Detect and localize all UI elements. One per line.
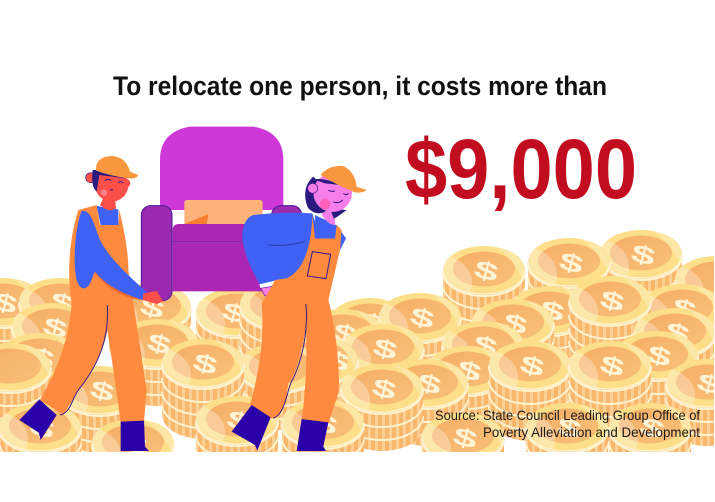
pile of gold coins: $ (27, 412, 58, 445)
pile of gold coins: $ (120, 428, 151, 461)
pile of gold coins: $ (40, 312, 71, 345)
mover: right worker (232, 166, 367, 451)
pile of gold coins: $ (224, 405, 255, 438)
pile of gold coins: $ (662, 317, 693, 350)
pile of gold coins: $ (500, 308, 531, 341)
pile of gold coins: $ (310, 408, 341, 441)
pile of gold coins: $ (414, 368, 445, 401)
infographic canvas (0, 76, 714, 452)
pile of gold coins: $ (357, 307, 388, 340)
pile of gold coins: $ (597, 350, 628, 383)
pile of gold coins: $ (370, 333, 401, 366)
pile of gold coins: $ (537, 295, 568, 328)
pile of gold coins: $ (628, 239, 659, 272)
pile of gold coins: $ (322, 345, 353, 378)
pile of gold coins: $ (450, 422, 481, 455)
pile of gold coins: $ (190, 348, 221, 381)
pile of gold coins: $ (517, 350, 548, 383)
pile of gold coins: $ (597, 285, 628, 318)
pile of gold coins (0, 230, 715, 502)
pile of gold coins: $ (644, 340, 675, 373)
illustration: movers and armchair (19, 127, 367, 451)
pile of gold coins: $ (407, 302, 438, 335)
armchair (141, 127, 302, 301)
big number: cost: $9,000 (405, 122, 637, 216)
pile of gold coins: $ (669, 293, 700, 326)
mover: left worker (19, 156, 163, 451)
pile of gold coins: $ (556, 247, 587, 280)
pile of gold coins: $ (87, 375, 118, 408)
pile of gold coins: $ (454, 355, 485, 388)
pile of gold coins: $ (471, 255, 502, 288)
pile of gold coins: $ (144, 328, 175, 361)
pile of gold coins: $ (219, 297, 250, 330)
pile of gold coins: $ (27, 342, 58, 375)
title: To relocate one person, it costs more than (113, 71, 607, 101)
pile of gold coins: $ (137, 292, 168, 325)
source note: Poverty Alleviation and Development (483, 424, 700, 440)
source note: Source: State Council Leading Group Office of (435, 407, 700, 423)
pile of gold coins: $ (47, 287, 78, 320)
source note (435, 407, 700, 440)
pile of gold coins: $ (637, 412, 668, 445)
pile of gold coins: $ (369, 373, 400, 406)
pile of gold coins: $ (554, 412, 585, 445)
pile of gold coins: $ (330, 318, 361, 351)
pile of gold coins: $ (470, 330, 501, 363)
